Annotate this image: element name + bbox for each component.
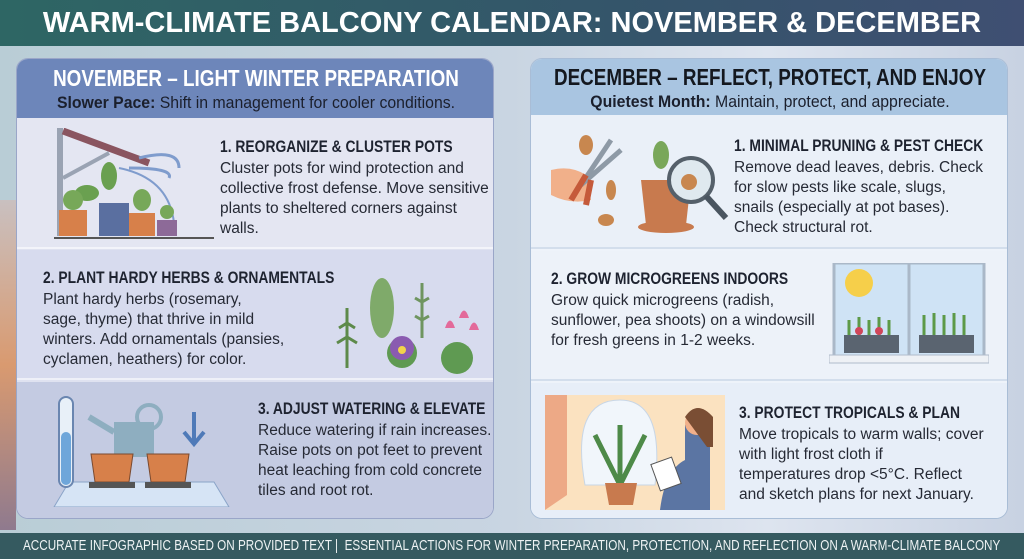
text: watering: Reduce watering if rain increases. xyxy=(258,422,491,439)
panel: november xyxy=(16,58,494,519)
december header xyxy=(531,59,1009,115)
november header: NOVEMBER – LIGHT WINTER PREPARATION xyxy=(53,65,459,91)
text: herbs: Plant hardy herbs (rosemary, xyxy=(43,291,242,308)
text: reorganize xyxy=(220,138,489,237)
icon: windowsill microgreens xyxy=(829,263,989,364)
text: protect tropicals: with light frost cloth if xyxy=(739,446,883,463)
footer band: ACCURATE INFOGRAPHIC BASED ON PROVIDED TEXT | ESSENTIAL ACTIONS FOR WINTER PREPARATION, PROTECTION, AND REFLECTION ON A WARM-CLIMATE BALCONY xyxy=(23,537,1000,554)
dec row 2 xyxy=(531,251,1009,381)
text: protect tropicals: 3. PROTECT TROPICALS & PLAN xyxy=(739,404,960,422)
text: protect tropicals: temperatures drop <5°C. Reflect xyxy=(739,466,962,483)
dec row 1 xyxy=(531,115,1009,249)
text: reorganize: collective frost defense. Move sensitive xyxy=(220,180,489,197)
text: watering: heat leaching from cold concrete xyxy=(258,462,482,479)
text: reorganize: 1. REORGANIZE & CLUSTER POTS xyxy=(220,138,453,156)
dec row 3 xyxy=(531,383,1009,520)
text: microgreens xyxy=(551,270,815,349)
text: microgreens: sunflower, pea shoots) on a windowsill xyxy=(551,312,815,329)
text: pruning: Check structural rot. xyxy=(734,219,873,236)
text: microgreens: for fresh greens in 1-2 weeks. xyxy=(551,332,755,349)
text: pruning: for slow pests like scale, slugs, xyxy=(734,179,946,196)
icon: balcony cluster pots xyxy=(54,128,214,239)
title band: WARM-CLIMATE BALCONY CALENDAR: NOVEMBER & DECEMBER xyxy=(43,7,981,39)
nov row 1 xyxy=(17,118,495,249)
text: watering xyxy=(258,400,491,499)
text: pruning xyxy=(734,137,984,236)
november header: Slower Pace: Shift in management for cooler conditions. xyxy=(57,93,455,112)
background left warm tones xyxy=(0,200,16,530)
text: pruning: Remove dead leaves, debris. Check xyxy=(734,159,983,176)
text: herbs: sage, thyme) that thrive in mild xyxy=(43,311,254,328)
text: reorganize: Cluster pots for wind protection and xyxy=(220,160,464,177)
footer band xyxy=(0,533,1024,559)
text: herbs xyxy=(43,269,334,368)
panel: december xyxy=(530,58,1008,519)
title band xyxy=(0,0,1024,46)
december header: Quietest Month: Maintain, protect, and appreciate. xyxy=(590,92,950,111)
icon: pruning and magnifier xyxy=(551,135,728,233)
text: reorganize: plants to sheltered corners against xyxy=(220,200,457,217)
text: herbs: cyclamen, heathers) for color. xyxy=(43,351,246,368)
text: herbs: winters. Add ornamentals (pansies, xyxy=(43,331,284,348)
icon: herbs and flowers xyxy=(336,278,479,374)
text: reorganize: walls. xyxy=(220,220,259,237)
text: pruning: snails (especially at pot bases). xyxy=(734,199,949,216)
text: microgreens: 2. GROW MICROGREENS INDOORS xyxy=(551,270,788,288)
december header: DECEMBER – REFLECT, PROTECT, AND ENJOY xyxy=(554,64,986,90)
text: watering: tiles and root rot. xyxy=(258,482,373,499)
nov row 2 xyxy=(17,250,495,380)
text: herbs: 2. PLANT HARDY HERBS & ORNAMENTALS xyxy=(43,269,334,287)
icon: watering and pots xyxy=(54,396,230,507)
nov row 3 xyxy=(17,382,495,522)
november header xyxy=(17,59,495,118)
text: microgreens: Grow quick microgreens (radish, xyxy=(551,292,774,309)
text: protect tropicals: Move tropicals to warm walls; cover xyxy=(739,426,984,443)
text: protect tropicals xyxy=(739,404,984,503)
text: watering: 3. ADJUST WATERING & ELEVATE xyxy=(258,400,485,418)
icon: covered tropical and planner xyxy=(545,395,725,510)
text: pruning: 1. MINIMAL PRUNING & PEST CHECK xyxy=(734,137,983,155)
text: protect tropicals: and sketch plans for next January. xyxy=(739,486,974,503)
text: watering: Raise pots on pot feet to prevent xyxy=(258,442,482,459)
